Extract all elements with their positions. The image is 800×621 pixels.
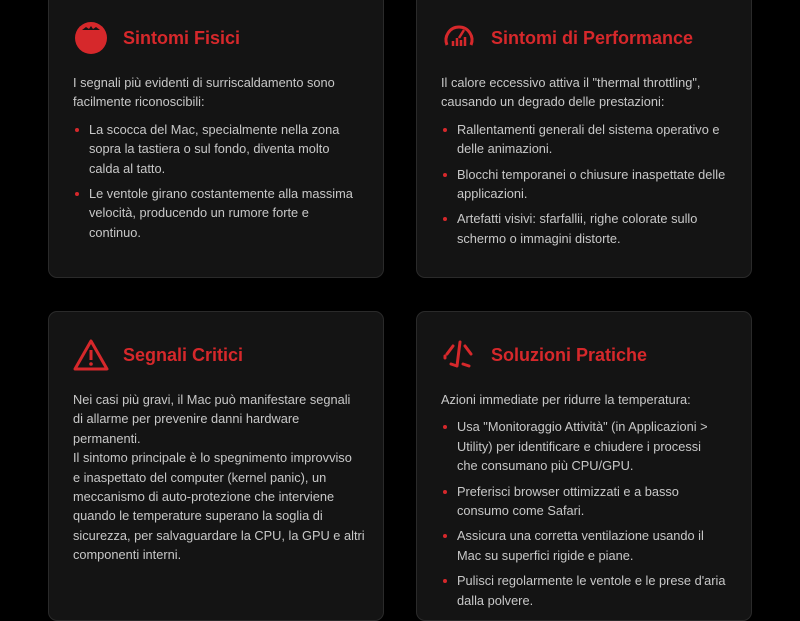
panel: soluzioni pratiche (416, 311, 752, 621)
text: segnali critici body: di allarme per prevenire danni hardware (73, 411, 299, 426)
text: soluzioni body: Preferisci browser ottimizzati e a basso consumo come Safari. (457, 484, 679, 518)
text: performance body: Artefatti visivi: sfarfallii, righe colorate sullo schermo o immagini distorte. (457, 211, 697, 246)
panel: sintomi fisici (48, 0, 384, 278)
text: segnali critici body: quando le temperature superano la soglia di (73, 508, 323, 523)
text: segnali critici body: permanenti. (73, 431, 141, 446)
heading: sintomi fisici: Sintomi Fisici (123, 28, 240, 48)
heading: soluzioni pratiche (444, 340, 647, 368)
text: segnali critici body: Nei casi più gravi, il Mac può manifestare segnali (73, 392, 350, 407)
text: performance body (441, 75, 725, 246)
panel: segnali critici (48, 311, 384, 621)
text: soluzioni body: Pulisci regolarmente le ventole e le prese d'aria dalla polvere. (457, 573, 725, 608)
text: performance body: Il calore eccessivo attiva il "thermal throttling", causando un degrado delle prestazioni: (441, 75, 700, 109)
heading: sintomi fisici (75, 22, 240, 54)
heading: performance: Sintomi di Performance (491, 28, 693, 48)
text: soluzioni body: Assicura una corretta ventilazione usando il Mac su superfici rigide e piane. (457, 528, 704, 563)
panel: sintomi di performance (416, 0, 752, 278)
text: segnali critici body (73, 392, 365, 562)
heading: segnali critici (74, 339, 243, 370)
text: sintomi fisici body (73, 75, 353, 240)
text: segnali critici body: Il sintomo principale è lo spegnimento improvviso (73, 450, 352, 465)
text: sintomi fisici body: Le ventole girano costantemente alla massima velocità, producendo un rumore forte e continuo. (89, 186, 353, 240)
text: soluzioni body (441, 392, 726, 608)
text: sintomi fisici body: La scocca del Mac, specialmente nella zona sopra la tastiera o sul fondo, diventa molto calda al tatto. (89, 122, 339, 176)
text: soluzioni body: che consumano più CPU/GPU. (457, 458, 633, 473)
text: soluzioni body: Usa "Monitoraggio Attività" (in Applicazioni > (457, 419, 708, 434)
text: segnali critici body: componenti interni. (73, 547, 181, 562)
text: performance body: Blocchi temporanei o chiusure inaspettate delle applicazioni. (457, 167, 725, 201)
heading: soluzioni pratiche: Soluzioni Pratiche (491, 344, 647, 364)
text: segnali critici body: meccanismo di auto-protezione che interviene (73, 489, 334, 504)
text: sintomi fisici body: I segnali più evidenti di surriscaldamento sono facilmente riconoscibili: (73, 75, 335, 109)
text: soluzioni body: Utility) per identificare e chiudere i processi (457, 439, 701, 454)
text: performance body: Rallentamenti generali del sistema operativo e delle animazioni. (457, 122, 719, 156)
heading: segnali critici: Segnali Critici (123, 344, 243, 364)
text: soluzioni body: Azioni immediate per ridurre la temperatura: (441, 392, 691, 407)
text: segnali critici body: e inaspettato del computer (kernel panic), un (73, 470, 326, 485)
text: segnali critici body: sicurezza, per salvaguardare la CPU, la GPU e altri (73, 528, 365, 543)
